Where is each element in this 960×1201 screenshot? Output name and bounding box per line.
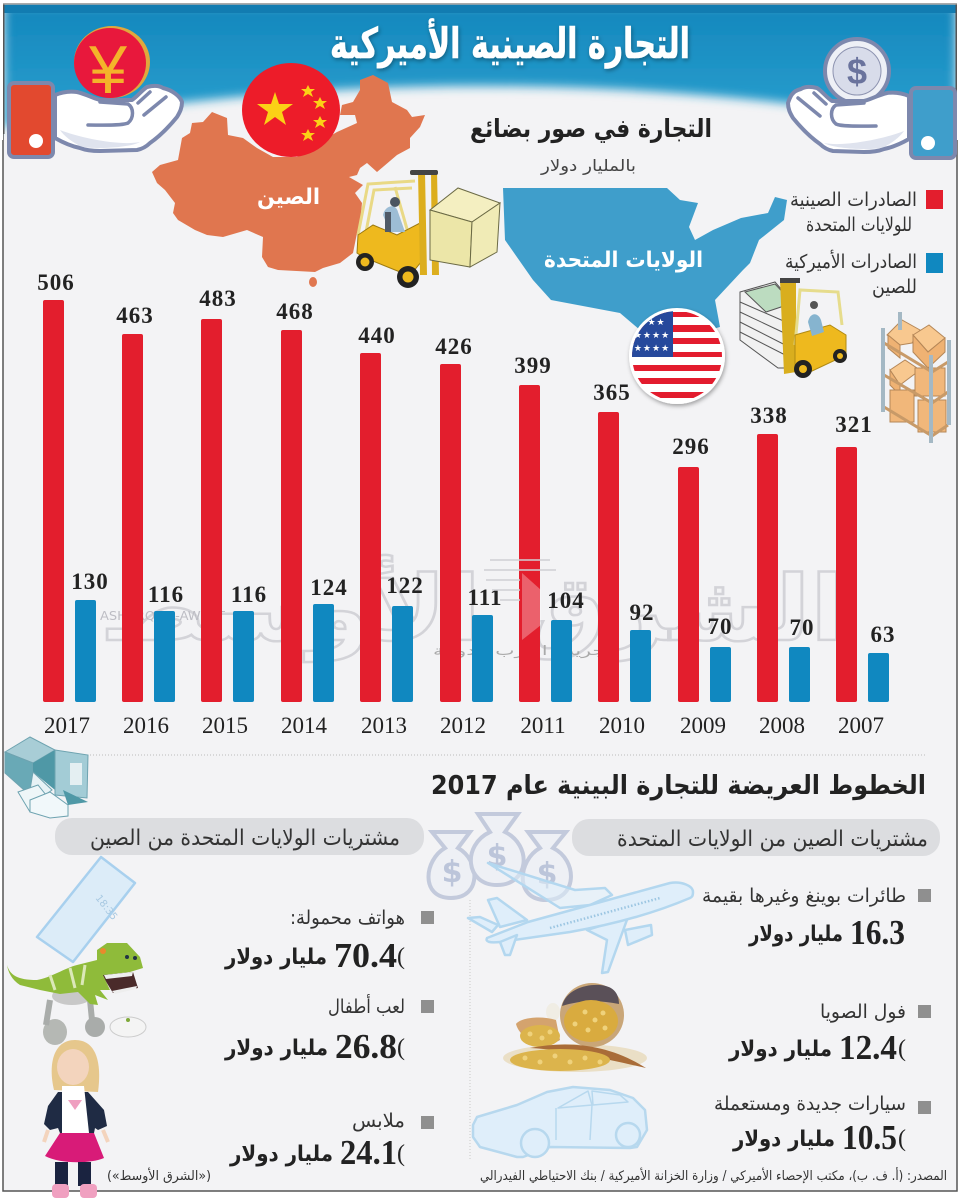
icon: soybeans — [503, 983, 647, 1072]
blue value labels: 124 — [310, 575, 348, 600]
section heading: الخطوط العريضة للتجارة البينية عام 2017 — [431, 771, 926, 801]
flag: China — [242, 63, 340, 157]
pill: China purchases from US: مشتريات الصين من الولايات المتحدة — [617, 827, 928, 852]
map: United States — [503, 188, 787, 335]
item: toys — [224, 994, 434, 1066]
title: التجارة الصينية الأميركية — [330, 18, 690, 69]
blue value labels: 92 — [630, 600, 654, 625]
icon: airplane — [468, 863, 693, 973]
item: toys: 26.8 — [335, 1027, 397, 1066]
watermark: جريدة العرب الدولية — [433, 644, 605, 659]
item: Boeing aircraft: مليار دولار — [748, 922, 843, 947]
red bars: Chinese exports — [43, 300, 857, 702]
label: China: الصين — [257, 185, 320, 210]
flag: United States — [629, 308, 725, 404]
blue value labels: 70 — [708, 614, 732, 639]
item: clothing: ( — [397, 1141, 405, 1167]
blue bars: US exports — [75, 600, 889, 702]
item: Boeing aircraft: 16.3 — [850, 913, 905, 952]
year axis: 2012 — [440, 713, 486, 738]
item: Boeing aircraft — [702, 885, 931, 952]
red value labels: 483 — [199, 286, 237, 311]
blue value labels — [71, 569, 896, 647]
icon: smartphone: 18:35 — [93, 893, 119, 923]
legend: للولايات المتحدة — [806, 214, 912, 236]
blue value labels: 130 — [71, 569, 109, 594]
legend: الصادرات الصينية — [790, 189, 917, 211]
unit note: بالمليار دولار — [540, 156, 636, 176]
item: mobile phones: هواتف محمولة: — [290, 907, 405, 929]
blue value labels: 104 — [547, 588, 585, 613]
icon: money bags — [428, 814, 571, 900]
year axis: 2007 — [838, 713, 884, 738]
item: soybeans: 12.4 — [839, 1028, 897, 1067]
blue value labels: 111 — [468, 585, 502, 610]
legend: للصين — [872, 276, 917, 298]
item: clothing — [229, 1110, 434, 1172]
icon: hand holding yuan coin — [9, 26, 182, 157]
icon: hand holding yuan coin: ¥ — [88, 32, 127, 108]
item: soybeans — [728, 1001, 931, 1067]
header band — [0, 0, 960, 140]
item: cars: مليار دولار — [732, 1127, 835, 1152]
red value labels: 321 — [835, 412, 873, 437]
red value labels: 338 — [750, 403, 788, 428]
item: soybeans: فول الصويا — [820, 1001, 906, 1023]
watermark: ASHARQ AL-AWSAT — [100, 609, 226, 623]
year axis: 2015 — [202, 713, 248, 738]
icon: boxes — [5, 737, 88, 818]
icon: car — [473, 1087, 647, 1157]
year axis: 2010 — [599, 713, 645, 738]
subtitle: التجارة في صور بضائع — [470, 114, 712, 144]
red value labels: 426 — [435, 334, 473, 359]
item: mobile phones: 70.4 — [334, 936, 397, 975]
flag: United States: ★★★★ — [634, 331, 670, 341]
item: mobile phones: مليار دولار — [224, 945, 327, 970]
icon: money bags: $ — [487, 839, 507, 874]
red value labels: 440 — [358, 323, 396, 348]
item: mobile phones: ( — [397, 944, 405, 970]
year axis: 2011 — [520, 713, 566, 738]
icon: money bags: $ — [537, 857, 557, 892]
icon: forklift with cash — [740, 278, 847, 378]
legend — [785, 189, 943, 298]
year axis — [44, 713, 884, 738]
flag: United States: ★★★ — [638, 318, 666, 328]
item: cars — [714, 1093, 931, 1157]
red value labels — [37, 270, 873, 459]
item: toys: ( — [397, 1035, 405, 1061]
flag: United States: ★★★★ — [634, 344, 670, 354]
blue value labels: 63 — [870, 622, 896, 647]
icon: hand holding dollar coin — [788, 39, 955, 158]
item: Boeing aircraft: طائرات بوينغ وغيرها بقيمة — [702, 885, 906, 907]
item: toys: لعب أطفال — [328, 994, 405, 1018]
blue value labels: 122 — [386, 573, 424, 598]
year axis: 2009 — [680, 713, 726, 738]
pill: China purchases from US — [572, 819, 940, 856]
bar chart — [37, 270, 896, 738]
blue value labels: 70 — [790, 615, 814, 640]
item: cars: سيارات جديدة ومستعملة — [714, 1093, 906, 1115]
item: clothing: 24.1 — [340, 1133, 397, 1172]
year axis: 2014 — [281, 713, 328, 738]
icon: toy dinosaur — [7, 943, 146, 1045]
item: toys: مليار دولار — [224, 1036, 328, 1061]
icon: money bags: $ — [442, 855, 462, 890]
icon: forklift with crate — [356, 170, 500, 288]
year axis: 2013 — [361, 713, 407, 738]
icon: doll — [44, 1040, 108, 1198]
red value labels: 468 — [276, 299, 314, 324]
watermark: الشرق الأوسط — [100, 555, 845, 663]
icon: warehouse shelves — [883, 312, 949, 443]
legend: الصادرات الأميركية — [785, 250, 917, 273]
red value labels: 296 — [672, 434, 710, 459]
icon: smartphone — [37, 857, 135, 962]
credit: («الشرق الأوسط») — [107, 1167, 211, 1184]
pill: US purchases from China — [55, 818, 424, 855]
blue value labels: 116 — [231, 582, 267, 607]
item: mobile phones — [224, 907, 434, 975]
item: clothing: مليار دولار — [229, 1142, 333, 1167]
pill: US purchases from China: مشتريات الولايات المتحدة من الصين — [90, 826, 400, 851]
red value labels: 463 — [116, 303, 154, 328]
item: soybeans: ( — [898, 1036, 906, 1062]
icon: hand holding dollar coin: $ — [847, 51, 867, 92]
red value labels: 399 — [514, 353, 552, 378]
year axis: 2008 — [759, 713, 805, 738]
red value labels: 365 — [593, 380, 631, 405]
label: United States: الولايات المتحدة — [544, 248, 703, 273]
blue value labels: 116 — [148, 582, 184, 607]
year axis: 2017 — [44, 713, 90, 738]
watermark logo overlay — [484, 560, 556, 640]
item: cars: 10.5 — [842, 1118, 897, 1157]
map: China — [152, 75, 425, 287]
item: clothing: ملابس — [352, 1110, 405, 1132]
year axis: 2016 — [123, 713, 169, 738]
item: cars: ( — [898, 1126, 906, 1152]
red value labels: 506 — [37, 270, 75, 295]
item: soybeans: مليار دولار — [728, 1037, 832, 1062]
